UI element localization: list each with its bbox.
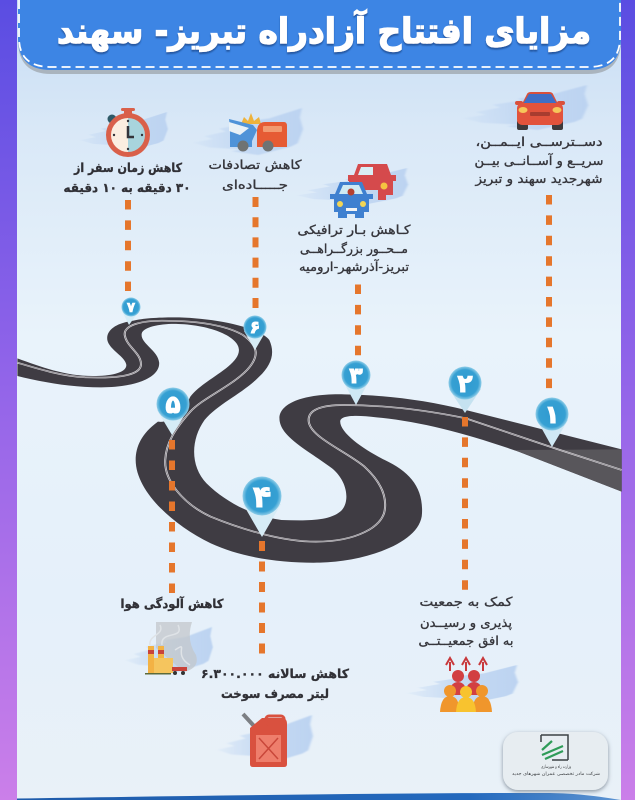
dashed connector 2 [462,417,468,590]
icon: red car [463,85,588,130]
pin 7: ۷ [127,300,136,316]
icon: traffic cars [297,164,408,218]
pin 4: ۴ [253,480,271,515]
pin 3 [342,360,370,405]
text: benefit 4 [201,666,350,701]
text: benefit 2: کمک به جمعیت [420,594,513,609]
title: مزایای افتتاح آزادراه تبریز- سهند [57,9,591,52]
dashed connector 7 [125,200,131,291]
text: benefit 1: شهرجدید سهند و تبریز [474,171,602,187]
text: benefit 1: دســترســی ایــمــن، [476,134,602,150]
road [17,317,622,563]
logo mark [541,735,568,760]
text: benefit 2 [418,594,514,649]
text: benefit 3: مــحــور بزرگــراهــی [300,241,408,257]
pin 6: ۶ [250,318,260,338]
text: benefit 2: به افق جمعیــتــی [418,633,514,649]
text: benefit 4: کاهش سالانه ۶.۳۰۰.۰۰۰ [201,666,350,681]
text: benefit 3: تبریز-آذرشهر-ارومیه [299,259,410,275]
pin 1: ۱ [544,400,560,429]
text: benefit 6: جـــــاده‌ای [222,177,288,192]
text: benefit 5: کاهش آلودگی هوا [120,596,224,611]
title banner [18,0,621,74]
icon: factory [125,622,213,675]
icon: stopwatch [80,108,168,157]
pin 4 [242,476,282,537]
text: benefit 4: لیتر مصرف سوخت [221,686,329,701]
text: benefit 1: سریــع و آســانــی بیــن [474,153,604,169]
icon: people [407,658,518,712]
pin 6 [244,316,266,350]
text: benefit 2: پذیری و رسیــدن [420,615,513,631]
pin 2 [448,366,482,413]
dashed connector 3 [355,284,361,357]
pin 3: ۳ [349,364,363,389]
icon: jerrycan [217,714,313,767]
icon: crash [193,108,303,155]
pin 1 [536,398,568,447]
pin 5 [156,388,190,435]
dashed connector 1 [546,195,552,390]
text: benefit 6 [208,157,302,192]
pin 7 [122,298,140,325]
dashed connector 5 [169,440,175,596]
pin 2: ۲ [457,369,473,398]
dashed connector 4 [259,541,265,654]
text: benefit 7 [63,160,190,195]
dashed connector 6 [252,197,258,308]
text: benefit 7: ۳۰ دقیقه به ۱۰ دقیقه [63,180,190,195]
text: benefit 7: کاهش زمان سفر از [73,160,183,175]
logo card: شرکت مادر تخصصی عمران شهرهای جدید [512,771,600,777]
text: benefit 6: کاهش تصادفات [208,157,302,173]
bottom blue strip [17,793,621,800]
logo card: وزارت راه و شهرسازی [541,765,571,770]
text: benefit 3 [298,222,411,275]
text: benefit 1 [474,134,604,187]
text: benefit 3: کـاهش بـار ترافیکی [298,222,411,238]
logo card [503,732,608,790]
pin 5: ۵ [165,390,181,419]
